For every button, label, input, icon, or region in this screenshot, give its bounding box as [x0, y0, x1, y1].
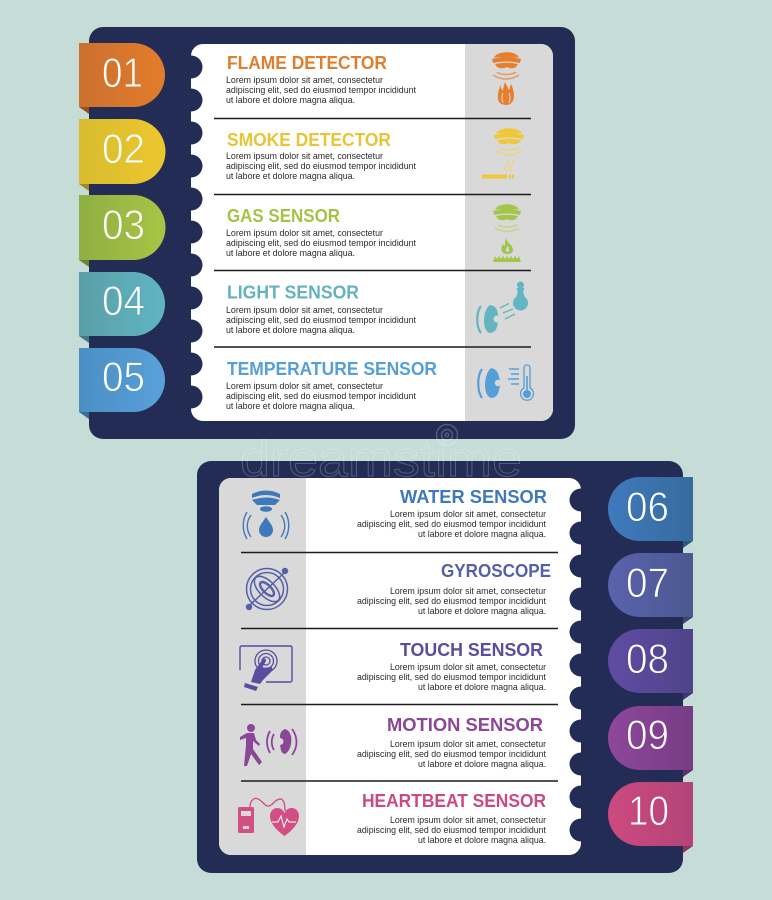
tab 09 [608, 706, 693, 777]
tab 08 [608, 629, 693, 700]
text: flame detector: FLAME DETECTOR [227, 52, 387, 73]
text: touch sensor: Lorem ipsum dolor sit amet, consectetur [390, 661, 546, 672]
top row dividers [214, 118, 531, 347]
icon: gas sensor [493, 204, 521, 262]
tab 07 [608, 553, 693, 624]
text: gas sensor: adipiscing elit, sed do eiusmod tempor incididunt [226, 237, 416, 248]
tab 04: 04 [102, 277, 145, 324]
text: water sensor [357, 486, 547, 539]
text: water sensor: WATER SENSOR [400, 486, 547, 507]
text: light sensor: adipiscing elit, sed do eiusmod tempor incididunt [226, 314, 416, 325]
text: water sensor: Lorem ipsum dolor sit amet, consectetur [390, 508, 546, 519]
text: smoke detector: Lorem ipsum dolor sit amet, consectetur [226, 150, 383, 161]
icon: gyroscope [246, 568, 288, 610]
tab 07: 07 [626, 559, 669, 606]
text: gyroscope: adipiscing elit, sed do eiusmod tempor incididunt [357, 595, 546, 606]
text: light sensor [226, 282, 416, 335]
text: touch sensor: ut labore et dolore magna aliqua. [418, 681, 546, 692]
tab 09: 09 [626, 711, 669, 758]
icon: flame detector [492, 52, 521, 105]
tab 05 [79, 348, 165, 419]
text: touch sensor: TOUCH SENSOR [400, 639, 543, 660]
tab 04 [79, 272, 165, 343]
text: motion sensor: adipiscing elit, sed do eiusmod tempor incididunt [357, 748, 546, 759]
icon: water sensor [243, 490, 289, 539]
text: smoke detector: adipiscing elit, sed do eiusmod tempor incididunt [226, 160, 416, 171]
tab 05: 05 [102, 353, 145, 400]
tab 01 [79, 43, 165, 114]
top white card [191, 44, 553, 421]
text: smoke detector: SMOKE DETECTOR [227, 129, 391, 150]
bottom panel backing [197, 461, 683, 873]
text: touch sensor [357, 639, 546, 692]
text: heartbeat sensor: Lorem ipsum dolor sit amet, consectetur [390, 814, 546, 825]
icon: temperature sensor [478, 365, 534, 400]
text: motion sensor: MOTION SENSOR [387, 714, 543, 735]
tab 06: 06 [626, 483, 669, 530]
text: light sensor: ut labore et dolore magna aliqua. [226, 324, 355, 335]
icon: smoke detector [482, 128, 524, 178]
tab 01: 01 [102, 49, 143, 96]
text: gas sensor: GAS SENSOR [227, 205, 340, 226]
text: motion sensor [357, 714, 546, 769]
text: flame detector: adipiscing elit, sed do eiusmod tempor incididunt [226, 84, 416, 95]
text: temperature sensor [226, 358, 437, 411]
bottom row dividers [241, 552, 558, 781]
text: gas sensor: Lorem ipsum dolor sit amet, consectetur [226, 227, 383, 238]
text: smoke detector [226, 129, 416, 181]
bottom scalloped edge [570, 488, 592, 842]
text: water sensor: ut labore et dolore magna aliqua. [418, 528, 546, 539]
tab 02: 02 [102, 125, 145, 172]
text: gyroscope: GYROSCOPE [441, 560, 551, 581]
text: temperature sensor: TEMPERATURE SENSOR [227, 358, 437, 379]
text: temperature sensor: Lorem ipsum dolor sit amet, consectetur [226, 380, 383, 391]
text: gyroscope: Lorem ipsum dolor sit amet, consectetur [390, 585, 546, 596]
text: gas sensor [226, 205, 416, 258]
text: heartbeat sensor [357, 790, 546, 845]
tab 10: 10 [628, 787, 669, 834]
tab 10 [608, 782, 693, 853]
top grey icon strip [465, 44, 553, 421]
text: water sensor: adipiscing elit, sed do eiusmod tempor incididunt [357, 518, 546, 529]
top scalloped edge [180, 56, 202, 408]
text: gyroscope [357, 560, 551, 616]
icon: touch sensor [240, 646, 292, 691]
text: flame detector: ut labore et dolore magna aliqua. [226, 94, 355, 105]
text: temperature sensor: ut labore et dolore magna aliqua. [226, 400, 355, 411]
panel: bottom sensors [197, 461, 683, 873]
text: light sensor: LIGHT SENSOR [227, 282, 359, 302]
text: gyroscope: ut labore et dolore magna aliqua. [418, 605, 546, 616]
tab 06 [608, 477, 693, 548]
tab 08: 08 [626, 635, 669, 682]
text: smoke detector: ut labore et dolore magna aliqua. [226, 170, 355, 181]
text: light sensor: Lorem ipsum dolor sit amet, consectetur [226, 304, 383, 315]
icon: heartbeat sensor [238, 798, 299, 836]
tab 02 [79, 119, 166, 191]
tab 03 [79, 195, 166, 267]
icon: motion sensor [240, 724, 296, 766]
text: motion sensor: ut labore et dolore magna aliqua. [418, 758, 546, 769]
top panel backing [89, 27, 575, 439]
text: flame detector [226, 52, 416, 105]
text: flame detector: Lorem ipsum dolor sit amet, consectetur [226, 74, 383, 85]
watermark: dreamstime [240, 431, 522, 487]
text: touch sensor: adipiscing elit, sed do eiusmod tempor incididunt [357, 671, 546, 682]
text: heartbeat sensor: adipiscing elit, sed do eiusmod tempor incididunt [357, 824, 546, 835]
icon: light sensor [477, 282, 528, 333]
text: gas sensor: ut labore et dolore magna aliqua. [226, 247, 355, 258]
panel: top sensors [89, 27, 575, 439]
text: temperature sensor: adipiscing elit, sed do eiusmod tempor incididunt [226, 390, 416, 401]
text: heartbeat sensor: HEARTBEAT SENSOR [362, 790, 546, 811]
text: heartbeat sensor: ut labore et dolore magna aliqua. [418, 834, 546, 845]
bottom white card [219, 478, 581, 855]
text: motion sensor: Lorem ipsum dolor sit amet, consectetur [390, 738, 546, 749]
bottom grey icon strip [219, 478, 306, 855]
tab 03: 03 [102, 201, 145, 248]
